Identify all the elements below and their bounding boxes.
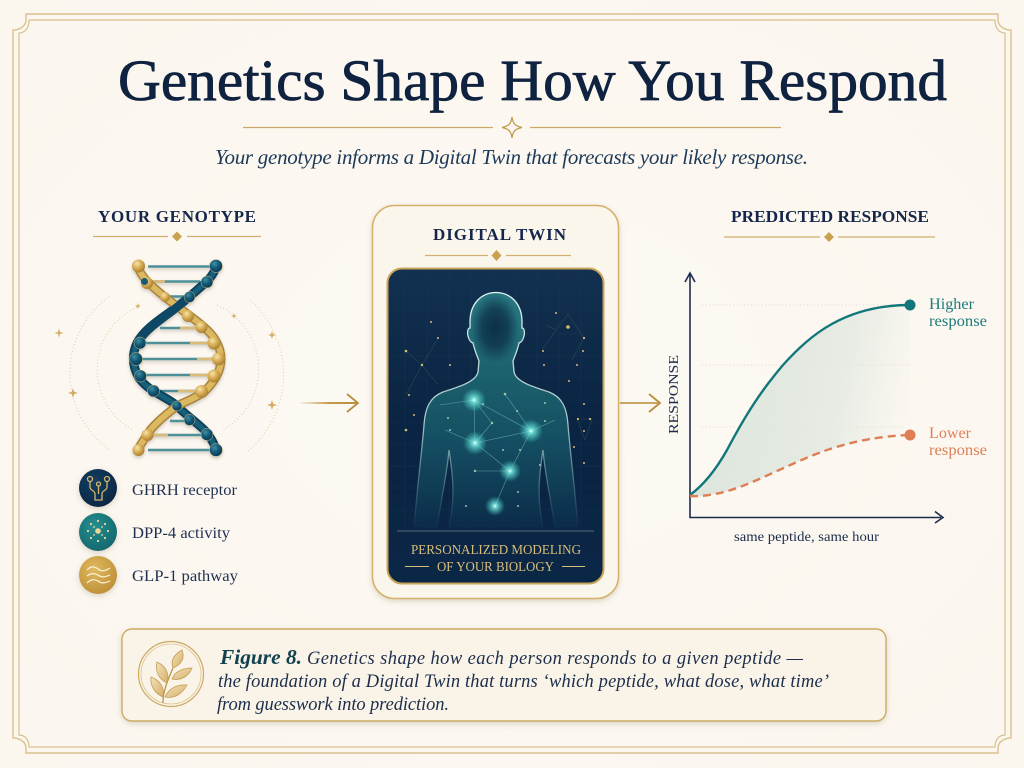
heading: predicted response: PREDICTED RESPONSE: [731, 207, 929, 226]
caption text: Genetics shape how each person responds to a given peptide —: [307, 649, 804, 669]
icon: enzyme burst: [79, 513, 117, 551]
icon: waves: [79, 556, 117, 594]
caption: personalized modeling: OF YOUR BIOLOGY: [437, 560, 554, 575]
panel: digital twin: [372, 206, 618, 598]
heading: your genotype: YOUR GENOTYPE: [98, 207, 256, 226]
label: DPP-4 activity: [132, 525, 230, 542]
heading divider: [425, 250, 571, 261]
shaded gap between curves: [690, 305, 910, 496]
label: higher response: response: [929, 313, 987, 330]
caption text: the foundation of a Digital Twin that turns ‘which peptide, what dose, what time’: [218, 672, 829, 692]
arrow: genotype to twin: [300, 394, 358, 412]
panel: figure caption: [122, 629, 886, 721]
panel: predicted response: [667, 207, 987, 545]
icon: receptor: [79, 469, 117, 507]
legend: DPP-4 activity: [79, 513, 230, 551]
icon: DNA helix: [130, 260, 225, 456]
label: lower response: [929, 425, 987, 459]
grid lines: [702, 305, 910, 427]
label: higher response: [929, 296, 987, 330]
legend: GLP-1 pathway: [79, 556, 238, 594]
caption rule: [397, 530, 594, 532]
arrow: twin to response: [620, 394, 660, 412]
label: higher response: Higher: [929, 296, 975, 313]
heading divider: [93, 232, 261, 242]
card: [372, 206, 618, 598]
caption box: [122, 629, 886, 721]
caption: personalized modeling: PERSONALIZED MODELING: [411, 543, 581, 558]
caption: personalized modeling: [405, 543, 585, 575]
panel: your genotype: [54, 207, 284, 594]
axes: [685, 273, 943, 523]
digital body figure: [388, 269, 603, 531]
title: Genetics Shape How You Respond: [118, 48, 947, 113]
dotted rings and sparkles: [54, 296, 284, 452]
label: lower response: response: [929, 442, 987, 459]
subtitle: Your genotype informs a Digital Twin that forecasts your likely response.: [215, 145, 808, 169]
heading divider: [724, 232, 935, 242]
axis label: same peptide: same peptide, same hour: [734, 530, 879, 545]
heading: digital twin: DIGITAL TWIN: [433, 225, 567, 244]
icon: botanical sprig: [138, 642, 204, 706]
curve: lower response: [690, 430, 916, 496]
dark portrait panel: [388, 268, 604, 584]
axis label: response: RESPONSE: [667, 355, 682, 434]
legend: GHRH receptor: [79, 469, 238, 507]
title divider with sparkle: [243, 117, 781, 138]
caption text: from guesswork into prediction.: [217, 695, 449, 715]
curve: higher response: [690, 300, 916, 495]
label: GHRH receptor: [132, 482, 238, 499]
caption text: Figure 8.: [219, 645, 302, 669]
caption text: [217, 645, 829, 715]
label: GLP-1 pathway: [132, 568, 238, 585]
label: lower response: Lower: [929, 425, 972, 442]
line chart: [667, 273, 987, 545]
